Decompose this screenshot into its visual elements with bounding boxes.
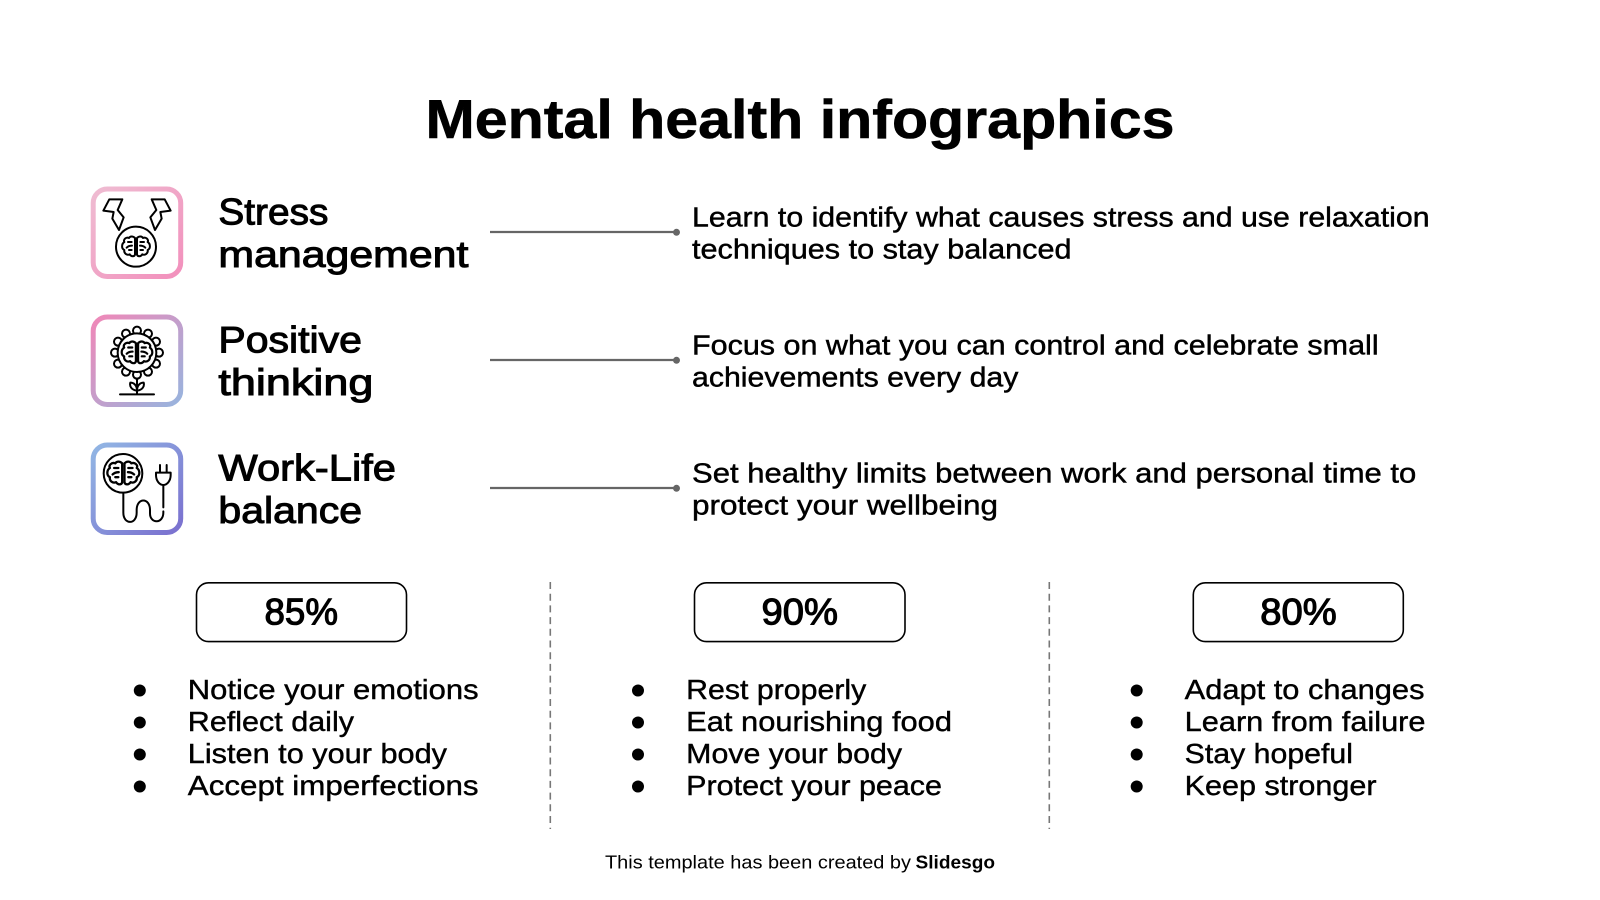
bullet list: 90%: Rest properly [686, 674, 867, 705]
heading: stress management [218, 192, 469, 275]
stat: 90% [694, 583, 905, 642]
bullet list: 85%: Listen to your body [188, 738, 447, 769]
description: stress management [692, 202, 1430, 264]
heading: stress management: management [218, 234, 469, 275]
panel: 90% column [632, 583, 952, 801]
footer credit: This template has been created by [605, 852, 911, 872]
description: work-life balance: Set healthy limits between work and personal time to [692, 458, 1416, 488]
bullet list: 90%: Move your body [686, 738, 902, 769]
connector arrow [490, 229, 680, 236]
bullet list: 80%: Keep stronger [1185, 770, 1376, 801]
title: Mental health infographics [426, 88, 1174, 150]
panel: 85% column [134, 583, 479, 801]
panel: stress management [93, 189, 1430, 276]
bullet list: 90%: Eat nourishing food [686, 706, 952, 737]
bullet list: 90%: Protect your peace [686, 770, 942, 801]
stat: 85%: 85% [264, 592, 338, 632]
icon: brain flower [93, 317, 181, 404]
bullet list: 85% [134, 674, 479, 801]
description: stress management: Learn to identify what causes stress and use relaxation [692, 202, 1430, 232]
stat: 80% [1193, 583, 1403, 642]
bullet list: 80%: Learn from failure [1185, 706, 1426, 737]
bullet list: 85%: Accept imperfections [188, 770, 479, 801]
footer credit: Slidesgo [916, 852, 995, 872]
heading: positive thinking [218, 320, 373, 403]
bullet list: 80% [1131, 674, 1426, 801]
heading: work-life balance: Work-Life [218, 448, 396, 488]
description: work-life balance [692, 458, 1416, 520]
description: positive thinking: Focus on what you can control and celebrate small [692, 330, 1379, 360]
description: positive thinking: achievements every day [692, 362, 1019, 392]
description: stress management: techniques to stay balanced [692, 234, 1072, 264]
heading: stress management: Stress [218, 192, 328, 232]
stat: 80%: 80% [1260, 592, 1337, 632]
heading: work-life balance: balance [218, 490, 362, 531]
description: work-life balance: protect your wellbeing [692, 490, 998, 520]
heading: positive thinking: thinking [218, 362, 373, 403]
icon: brain with lightning bolts [93, 189, 181, 276]
description: positive thinking [692, 330, 1379, 392]
bullet list: 85%: Notice your emotions [188, 674, 479, 705]
bullet list: 80%: Adapt to changes [1185, 674, 1424, 705]
panel: positive thinking [93, 317, 1379, 404]
bullet list: 85%: Reflect daily [188, 706, 354, 737]
bullet list: 80%: Stay hopeful [1185, 738, 1353, 769]
connector arrow [490, 485, 680, 492]
heading: positive thinking: Positive [218, 320, 362, 360]
heading: work-life balance [218, 448, 396, 531]
icon: brain with plug [93, 445, 181, 532]
bullet list: 90% [632, 674, 952, 801]
connector arrow [490, 357, 680, 364]
panel: work-life balance [93, 445, 1416, 532]
stat: 90%: 90% [762, 592, 838, 632]
panel: 80% column [1131, 583, 1426, 801]
stat: 85% [196, 583, 406, 642]
